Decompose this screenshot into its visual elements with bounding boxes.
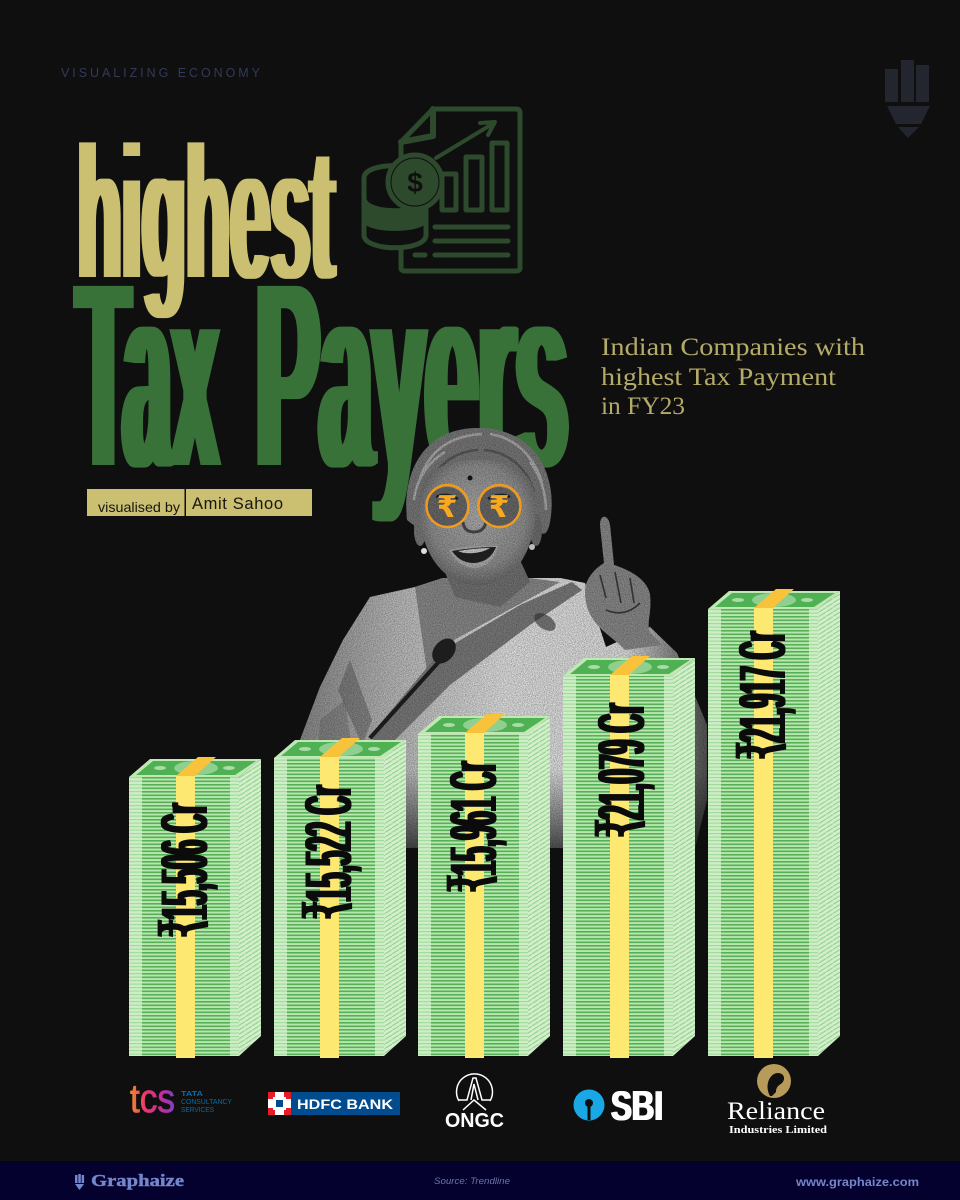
- lips: [449, 546, 498, 568]
- hand: [585, 517, 662, 650]
- credit bar: visualised by Amit Sahoo: [87, 489, 312, 516]
- logo: HDFC Bank: [268, 1092, 400, 1115]
- stack: TCS: ₹15,506 Cr: [146, 804, 223, 936]
- blouse and neck: [415, 578, 560, 680]
- nose: [463, 522, 486, 532]
- sash: [368, 582, 582, 745]
- rupee glasses: [426, 485, 520, 527]
- logo: Reliance: Industries Limited: [729, 1124, 827, 1136]
- logo: TCS: [130, 1077, 232, 1121]
- logo: HDFC Bank: HDFC BANK: [297, 1096, 393, 1112]
- icon: tax document with coins and chart: $: [407, 167, 423, 198]
- eyebrow label: VISUALIZING ECONOMY: [61, 66, 261, 80]
- hair: [406, 428, 552, 534]
- stack: ONGC: ₹15,961 Cr: [435, 762, 512, 892]
- mouth: [452, 547, 496, 563]
- logo: ONGC: [445, 1074, 504, 1132]
- logo: TCS: CONSULTANCY: [181, 1097, 232, 1106]
- subtitle: [601, 334, 866, 420]
- logo: ONGC: ONGC: [445, 1110, 504, 1132]
- title: Tax Payers: Tax: [77, 223, 220, 527]
- stack: ONGC: [418, 714, 550, 1058]
- text: highest: [78, 105, 334, 322]
- photo: finance minister with rupee eyes: ₹: [437, 490, 457, 525]
- saree folds: [338, 660, 372, 745]
- eye sockets: [427, 487, 467, 527]
- subtitle: highest Tax Payment: [601, 364, 836, 391]
- ears: [414, 514, 426, 546]
- text: ₹21,917 Cr: [724, 632, 801, 758]
- photo: finance minister with rupee eyes: ₹: [489, 490, 509, 525]
- bindi: [468, 476, 472, 480]
- source: Source: Trendline: [434, 1176, 510, 1187]
- credit bar: visualised by Amit Sahoo: Amit Sahoo: [192, 495, 283, 513]
- logo: Reliance: [727, 1064, 827, 1136]
- stack: SBI: ₹21,079 Cr: [583, 704, 660, 836]
- logo: SBI: [574, 1082, 663, 1129]
- credit bar: visualised by Amit Sahoo: visualised by: [98, 499, 180, 515]
- footer bar: [0, 1161, 960, 1200]
- logo: TCS: SERVICES: [181, 1105, 214, 1114]
- photo: finance minister with rupee eyes: [300, 428, 710, 848]
- stack: HDFC Bank: ₹15,522 Cr: [290, 786, 367, 918]
- neck: [440, 560, 530, 607]
- brand name: Graphaize: [91, 1171, 185, 1190]
- microphone: [370, 655, 445, 738]
- photo bottom fade: [300, 770, 710, 848]
- logo: TCS: TATA: [181, 1089, 204, 1098]
- logo: Reliance: Reliance: [727, 1098, 825, 1125]
- stack: SBI: [563, 656, 695, 1058]
- icon: footer pencil logo: [75, 1174, 84, 1190]
- stack: Reliance: [708, 589, 840, 1058]
- logo: SBI: SBI: [611, 1082, 663, 1129]
- saree body: [300, 578, 707, 848]
- face: [419, 460, 536, 585]
- logo: TCS: tcs: [130, 1077, 175, 1121]
- website: www.graphaize.com: [795, 1177, 919, 1189]
- subtitle: in FY23: [601, 393, 685, 420]
- subtitle: Indian Companies with: [601, 334, 866, 361]
- icon: brand pencil logo: [885, 60, 930, 138]
- stack: HDFC Bank: [274, 738, 406, 1058]
- earrings: [421, 548, 427, 554]
- stack: TCS: [129, 757, 261, 1058]
- icon: tax document with coins and chart: [364, 109, 520, 271]
